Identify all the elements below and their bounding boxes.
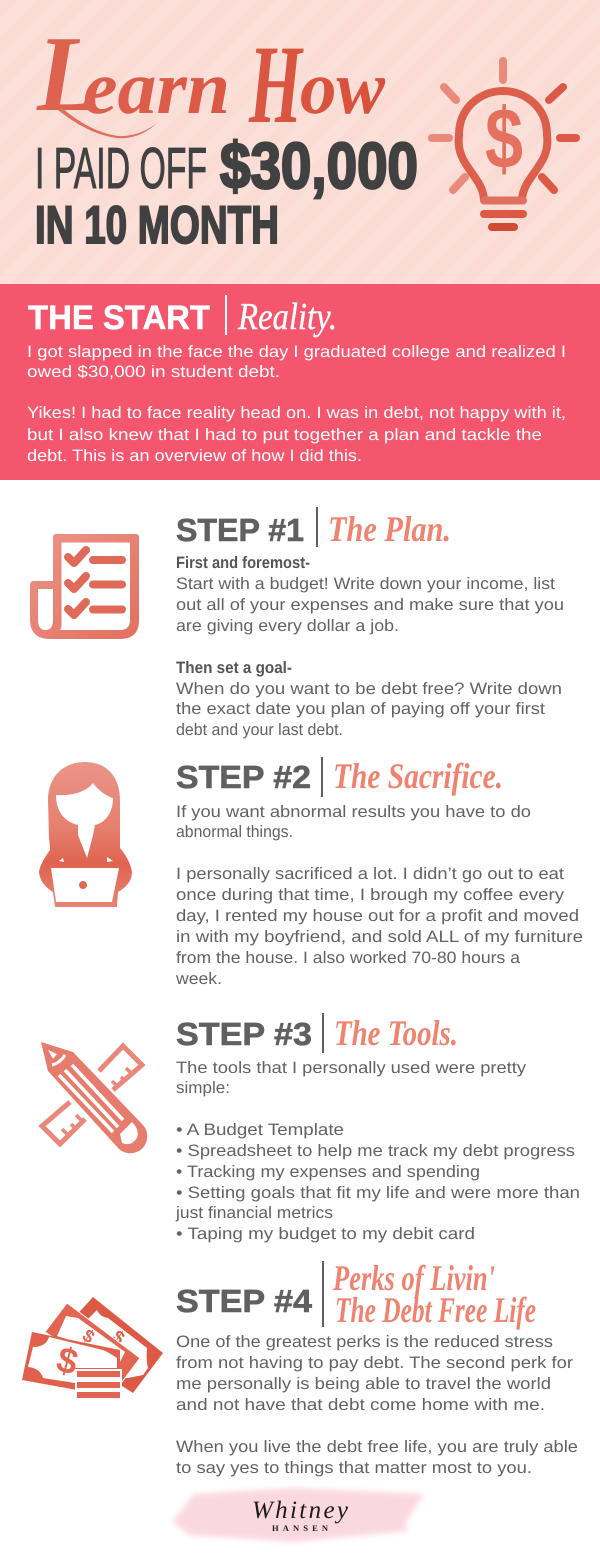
intro text: debt. This is an overview of how I did this. xyxy=(27,447,362,465)
icon: money bills: $ xyxy=(52,1338,82,1383)
step 1 text: Start with a budget! Write down your income, list xyxy=(176,575,555,593)
step 1 text: debt and your last debt. xyxy=(176,721,343,739)
step 1 text: Then set a goal- xyxy=(176,659,292,677)
step 2 text: If you want abnormal results you have to do xyxy=(176,803,531,821)
step 2 text: abnormal things. xyxy=(176,823,293,841)
step 3 text xyxy=(175,1059,580,1243)
title script: Learn How: ow xyxy=(300,46,385,130)
step 3 text: • Setting goals that fit my life and were more than xyxy=(176,1184,580,1202)
step 3 text: just financial metrics xyxy=(175,1204,333,1222)
step 2 text: week. xyxy=(175,970,222,988)
step 4 text: One of the greatest perks is the reduced stress xyxy=(176,1333,553,1351)
icon: checklist xyxy=(30,534,139,639)
title script: Learn How: earn xyxy=(83,46,230,130)
title line: I paid off $30,000: I PAID OFF xyxy=(35,136,207,201)
step 2 text: from the house. I also worked 70-80 hours a xyxy=(176,949,521,967)
title script: Learn How: L xyxy=(36,15,98,134)
step 1 text: When do you want to be debt free? Write down xyxy=(176,680,562,698)
step 3 text: • Tracking my expenses and spending xyxy=(176,1163,480,1181)
step 1 script heading: The Plan. xyxy=(328,509,451,549)
step 4 text: me personally is being able to travel the world xyxy=(176,1375,551,1393)
icon: money bills: $ xyxy=(109,1326,128,1348)
signature: Whitney Hansen on pink brush: HANSEN xyxy=(272,1523,329,1533)
step 4 script heading xyxy=(332,1258,536,1330)
panel: the start xyxy=(0,284,600,480)
step 3 text: simple: xyxy=(176,1079,230,1097)
title script: Learn How: H xyxy=(232,23,304,147)
step 1 text: the exact date you plan of paying off your first xyxy=(176,700,545,718)
step 4 heading: STEP #4 xyxy=(176,1283,312,1319)
step 1 xyxy=(176,507,564,739)
step 2 text: day, I rented my house out for a profit and moved xyxy=(176,907,579,925)
step 3 text: • A Budget Template xyxy=(176,1121,344,1139)
step 3 heading: STEP #3 xyxy=(176,1016,312,1052)
step 4 text: and not have that debt come home with me. xyxy=(176,1396,545,1414)
signature: Whitney Hansen on pink brush xyxy=(172,1488,424,1542)
heading: the start: THE START xyxy=(28,299,210,337)
title line: I paid off $30,000 xyxy=(35,129,418,202)
step 3 script heading: The Tools. xyxy=(334,1013,458,1053)
step 2 text: I personally sacrificed a lot. I didn’t go out to eat xyxy=(176,865,564,883)
title script: Learn How xyxy=(36,15,385,147)
intro text: I got slapped in the face the day I graduated college and realized I xyxy=(27,343,566,361)
script heading: reality: Reality. xyxy=(237,296,337,338)
icon: light bulb with dollar sign xyxy=(432,61,576,227)
step 1 text: out all of your expenses and make sure that you xyxy=(176,596,564,614)
step 3 text: • Spreadsheet to help me track my debt progress xyxy=(176,1142,575,1160)
step 1 heading: STEP #1 xyxy=(176,512,304,548)
step 4 xyxy=(176,1258,578,1477)
step 2 text xyxy=(175,803,583,988)
icon: woman at laptop xyxy=(39,762,132,907)
step 2 heading: STEP #2 xyxy=(176,759,311,795)
step 1 text: are giving every dollar a job. xyxy=(176,617,399,635)
icon: money bills xyxy=(22,1297,163,1400)
icon: light bulb with dollar sign: $ xyxy=(485,91,523,187)
intro text: but I also knew that I had to put together a plan and tackle the xyxy=(27,426,542,444)
title line: I paid off $30,000: $30,000 xyxy=(220,129,418,202)
title line: in 10 month: IN 10 MONTH xyxy=(35,196,279,255)
intro text: owed $30,000 in student debt. xyxy=(27,363,280,381)
header panel xyxy=(0,0,600,284)
step 3 text: The tools that I personally used were pretty xyxy=(176,1059,527,1077)
step 1 text xyxy=(176,554,564,739)
step 2 script heading: The Sacrifice. xyxy=(333,756,503,796)
icon: money bills: $ xyxy=(79,1325,98,1347)
step 4 text: from not having to pay debt. The second perk for xyxy=(176,1354,574,1372)
step 1 text: First and foremost- xyxy=(176,554,310,572)
step 3 xyxy=(175,1013,580,1243)
step 4 text: When you live the debt free life, you are truly able xyxy=(176,1438,578,1456)
intro text: Yikes! I had to face reality head on. I was in debt, not happy with it, xyxy=(27,404,566,422)
step 4 script heading: Perks of Livin' xyxy=(332,1258,495,1298)
signature: Whitney Hansen on pink brush: Whitney xyxy=(252,1497,349,1524)
step 2 xyxy=(175,756,583,988)
step 2 text: once during that time, I brough my coffee every xyxy=(176,886,565,904)
step 4 text: to say yes to things that matter most to you. xyxy=(176,1459,532,1477)
step 4 text xyxy=(176,1333,578,1477)
icon: pencil and ruler xyxy=(41,1042,147,1153)
step 3 text: • Taping my budget to my debit card xyxy=(176,1225,475,1243)
intro text xyxy=(27,343,566,465)
step 2 text: in with my boyfriend, and sold ALL of my furniture xyxy=(176,928,583,946)
